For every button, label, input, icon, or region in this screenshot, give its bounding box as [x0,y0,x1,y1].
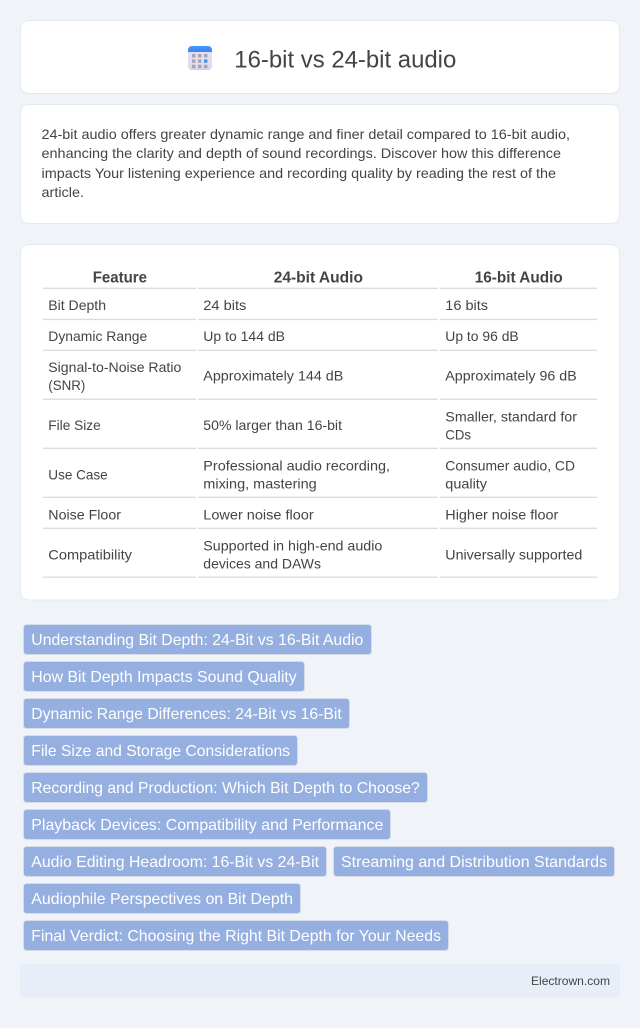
row: dynamic range: Dynamic Range [48,328,148,344]
tag: playback devices: Playback Devices: Compatibility and Performance [31,817,383,834]
row: noise floor: Lower noise floor [203,506,314,522]
tag: streaming standards: Streaming and Distribution Standards [341,854,607,871]
intro text: 24-bit audio offers greater dynamic range and finer detail compared to 16-bit audio, [42,126,570,142]
row: noise floor [48,506,559,522]
tag: final verdict [24,920,448,950]
panel: comparison table [20,244,620,600]
tag: sound quality: How Bit Depth Impacts Sound Quality [31,669,297,686]
row: file size: File Size [48,417,101,433]
row: bit depth: 16 bits [445,297,488,313]
row: use case: mixing, mastering [203,476,317,492]
tag: understanding bit depth: Understanding Bit Depth: 24-Bit vs 16-Bit Audio [31,632,363,649]
table header: 24-bit Audio [274,270,363,287]
row: bit depth: Bit Depth [48,297,106,313]
row: dynamic range [48,328,519,344]
row: file size [48,408,577,442]
footer credit: Electrown.com [531,974,610,988]
row: signal-to-noise ratio: Approximately 96 dB [445,368,577,384]
row: file size: CDs [445,426,471,442]
tag: recording and production [24,772,428,802]
row: bit depth: 24 bits [203,297,246,313]
row: dynamic range: Up to 96 dB [445,328,519,344]
row: compatibility: Universally supported [445,546,582,562]
row: compatibility [48,537,582,571]
row: use case: quality [445,476,487,492]
panel: title card [20,20,620,94]
row: file size: Smaller, standard for [445,408,577,424]
tag: dynamic range [24,698,350,728]
intro text [42,126,570,200]
tag: sound quality [24,662,304,692]
row: noise floor: Higher noise floor [445,506,559,522]
tag: understanding bit depth [24,624,372,654]
row: signal-to-noise ratio: (SNR) [48,377,85,393]
title: 16-bit vs 24-bit audio [234,46,456,73]
tag: playback devices [24,810,390,840]
tag: final verdict: Final Verdict: Choosing the Right Bit Depth for Your Needs [31,928,441,945]
table header: Feature [93,270,147,287]
tag: dynamic range: Dynamic Range Differences: 24-Bit vs 16-Bit [31,706,342,723]
table row lines [43,288,597,577]
icon: calendar [188,46,212,70]
row: use case [48,458,575,492]
panel: introduction [20,104,620,224]
row: compatibility: Compatibility [48,546,132,562]
row: bit depth [48,297,488,313]
intro text: enhancing the clarity and depth of sound recordings. Discover how this difference [42,145,561,161]
row: noise floor: Noise Floor [48,506,121,522]
tag: editing headroom [24,846,326,876]
topic tags [24,624,614,950]
tag: streaming standards [334,846,614,876]
row: use case: Professional audio recording, [203,458,390,474]
tag: audiophile perspectives [24,884,300,914]
row: compatibility: devices and DAWs [203,555,321,571]
row: signal-to-noise ratio: Approximately 144 dB [203,368,343,384]
row: use case: Consumer audio, CD [445,458,575,474]
table header: 16-bit Audio [475,270,563,287]
tag: file size: File Size and Storage Considerations [31,743,290,760]
tag: audiophile perspectives: Audiophile Perspectives on Bit Depth [31,891,293,908]
row: signal-to-noise ratio [48,359,577,393]
intro text: impacts Your listening experience and recording quality by reading the rest of the [42,165,556,181]
row: dynamic range: Up to 144 dB [203,328,285,344]
tag: editing headroom: Audio Editing Headroom: 16-Bit vs 24-Bit [31,854,320,871]
row: compatibility: Supported in high-end audio [203,537,383,553]
table header [93,270,563,287]
tag: file size [24,736,298,766]
tag: recording and production: Recording and Production: Which Bit Depth to Choose? [31,780,420,797]
row: use case: Use Case [48,466,108,482]
footer [20,964,620,998]
intro text: article. [42,184,84,200]
row: signal-to-noise ratio: Signal-to-Noise Ratio [48,359,182,375]
row: file size: 50% larger than 16-bit [203,417,342,433]
